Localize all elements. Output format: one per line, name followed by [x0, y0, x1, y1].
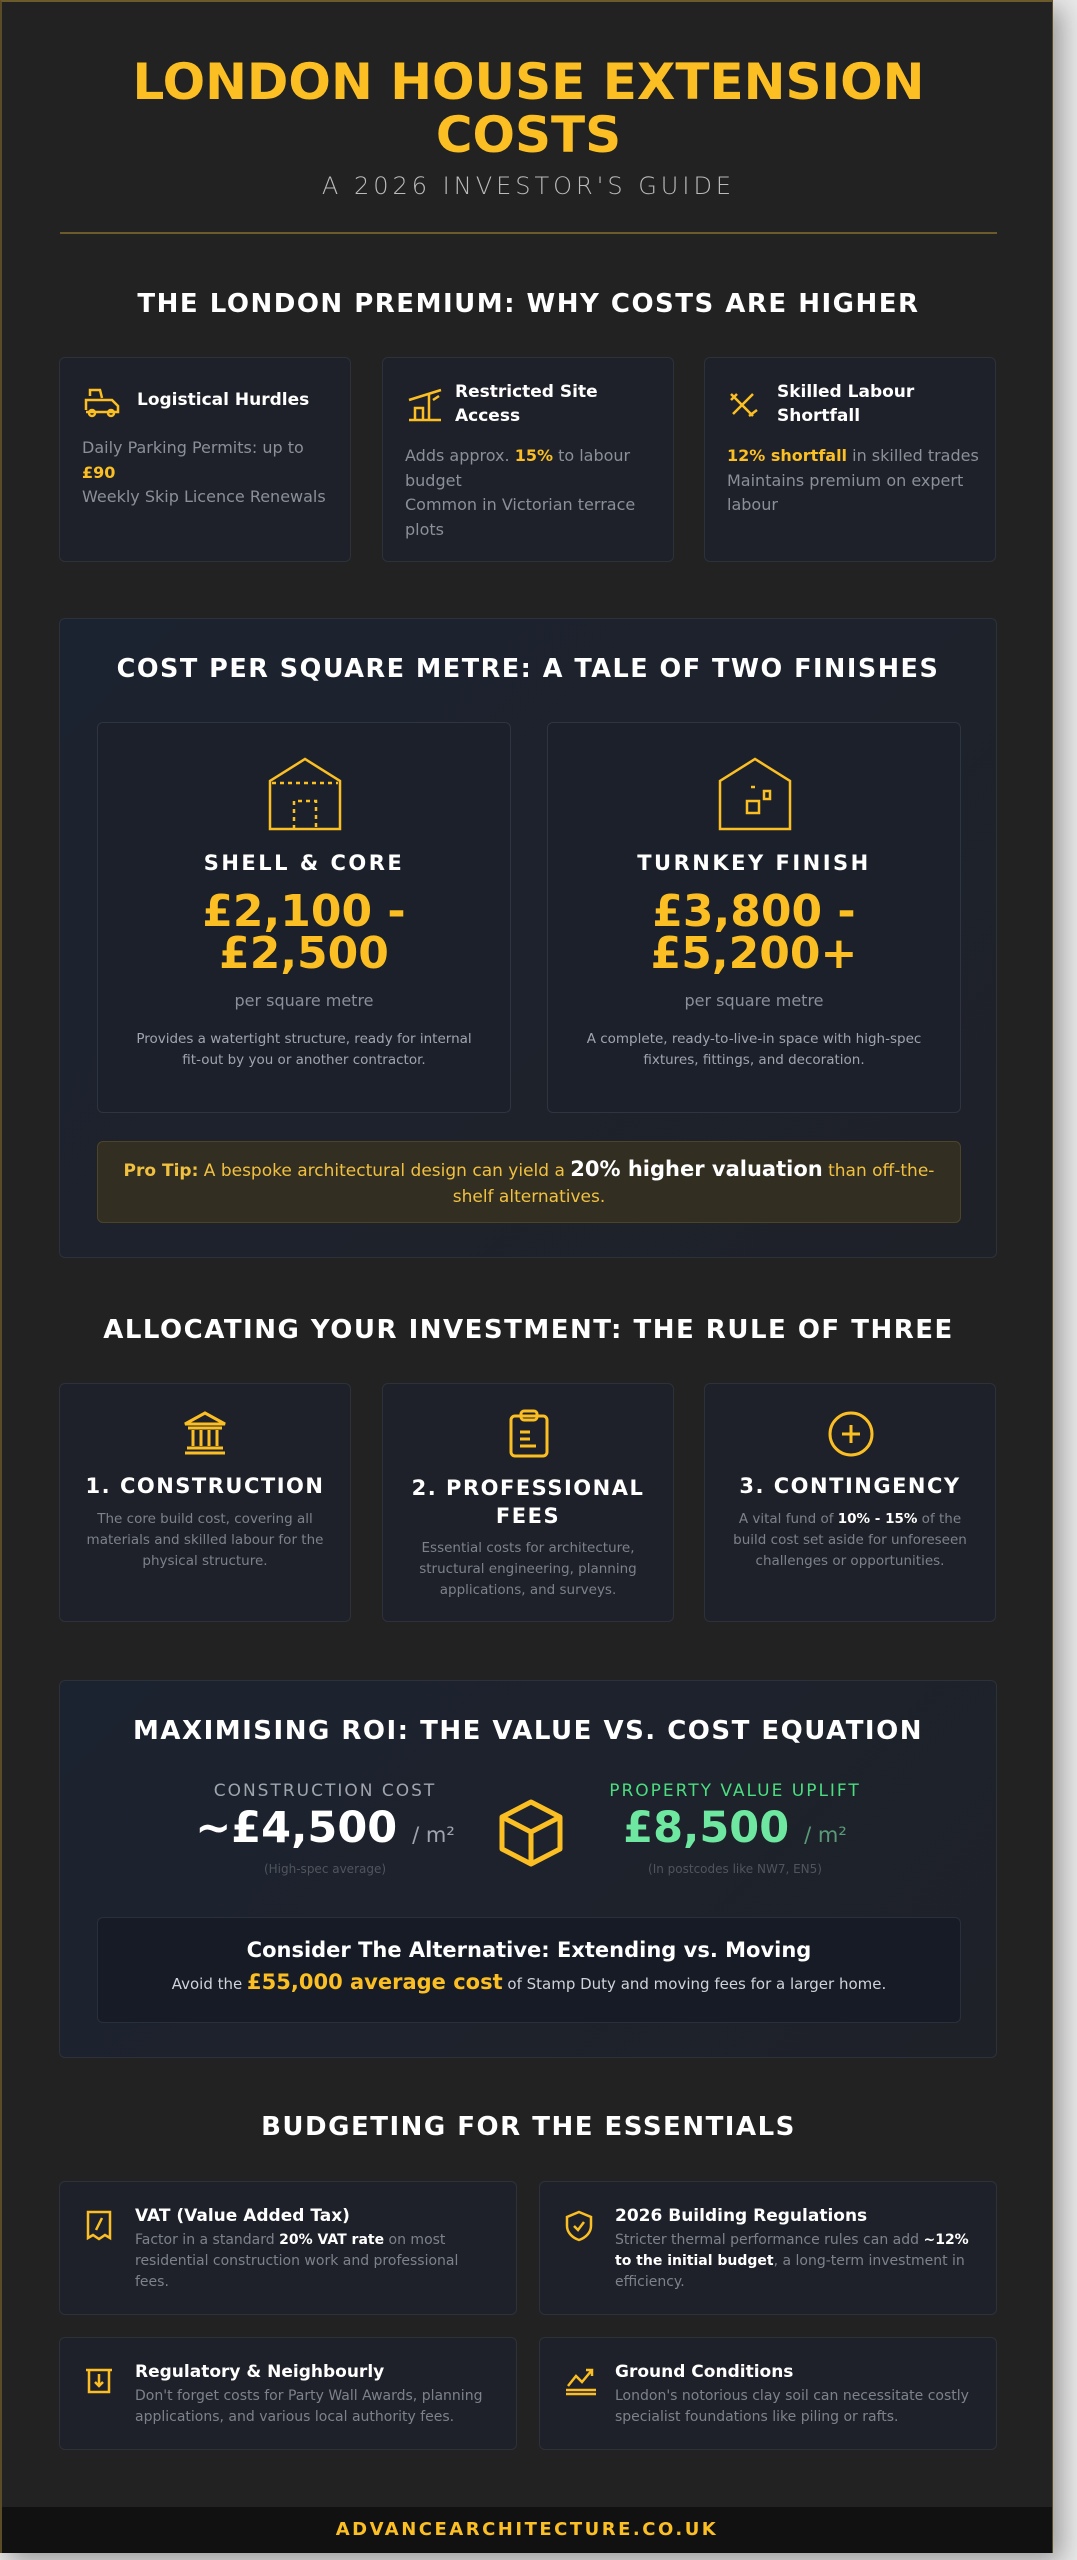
icon: house outline dashed	[268, 758, 342, 830]
description: A complete, ready-to-live-in space with high-spec fixtures, fittings, and decoration.	[587, 1031, 921, 1068]
card text: 12% shortfall in skilled trades	[727, 446, 979, 465]
heading: london premium: THE LONDON PREMIUM: WHY COSTS ARE HIGHER	[137, 289, 920, 319]
card text: The core build cost, covering all materials and skilled labour for the physical structure.	[87, 1511, 323, 1569]
panel: regulatory	[59, 2337, 517, 2450]
sub-card: turnkey	[547, 722, 961, 1113]
footer: ADVANCEARCHITECTURE.CO.UK	[336, 2519, 718, 2540]
callout: pro tip: Pro Tip: A bespoke architectural design can yield a 20% higher valuation than off-the-shelf alternatives.	[124, 1157, 934, 1207]
card title: Access	[455, 406, 520, 426]
card title: 2. PROFESSIONAL	[412, 1476, 644, 1500]
card title: Shortfall	[777, 406, 860, 426]
icon: cube	[500, 1800, 562, 1866]
heading: MAXIMISING ROI: THE VALUE VS. COST EQUATION	[133, 1716, 923, 1746]
stat: value uplift: £8,500 / m²	[623, 1803, 847, 1853]
card title: 1. CONSTRUCTION	[86, 1474, 324, 1498]
price: £2,500	[219, 928, 389, 979]
card title: 2026 Building Regulations	[615, 2206, 867, 2226]
subtitle: A 2026 INVESTOR'S GUIDE	[322, 172, 735, 200]
stat: construction cost: ~£4,500 / m²	[195, 1803, 455, 1853]
icon: shield	[566, 2210, 592, 2242]
heading: COST PER SQUARE METRE: A TALE OF TWO FINISHES	[117, 654, 939, 684]
stat: value uplift: (In postcodes like NW7, EN5)	[648, 1862, 822, 1876]
card title	[777, 382, 914, 426]
icon: crane	[408, 388, 442, 422]
panel: professional fees	[382, 1383, 674, 1622]
icon: plus circle	[828, 1412, 874, 1456]
card title: Skilled Labour	[777, 382, 914, 402]
stat: value uplift: PROPERTY VALUE UPLIFT	[609, 1781, 861, 1801]
panel: construction	[59, 1383, 351, 1622]
unit: per square metre	[234, 991, 374, 1010]
panel: contingency	[704, 1383, 996, 1622]
heading: essentials: BUDGETING FOR THE ESSENTIALS	[261, 2112, 796, 2142]
card title: FEES	[496, 1504, 560, 1528]
card text: Stricter thermal performance rules can add ~12% to the initial budget, a long-term investment in efficiency.	[615, 2232, 969, 2290]
heading: rule of three: ALLOCATING YOUR INVESTMENT: THE RULE OF THREE	[103, 1315, 954, 1345]
icon: chart	[566, 2368, 596, 2396]
unit: per square metre	[684, 991, 824, 1010]
card text: Essential costs for architecture, structural engineering, planning applications, and surveys.	[419, 1540, 637, 1598]
panel: cost per square metre	[59, 618, 997, 1258]
panel: VAT	[59, 2181, 517, 2315]
card text: Daily Parking Permits: up to £90	[82, 438, 304, 482]
card title	[412, 1476, 644, 1528]
price	[651, 886, 857, 979]
card text: A vital fund of 10% - 15% of the build cost set aside for unforeseen challenges or opportunities.	[733, 1511, 967, 1569]
icon: tools	[730, 393, 758, 417]
title: COSTS	[436, 106, 621, 164]
card title: Regulatory & Neighbourly	[135, 2362, 384, 2382]
panel: logistical hurdles	[59, 357, 351, 562]
panel: restricted site access	[382, 357, 674, 562]
panel: ground conditions	[539, 2337, 997, 2450]
stat: construction cost	[195, 1781, 455, 1876]
icon: van	[84, 388, 120, 418]
stat: construction cost: (High-spec average)	[264, 1862, 386, 1876]
callout: alternative	[97, 1917, 961, 2023]
label: TURNKEY FINISH	[637, 851, 871, 875]
card text: Weekly Skip Licence Renewals	[82, 487, 326, 506]
card text	[727, 446, 979, 514]
panel: skilled labour	[704, 357, 996, 562]
stat: construction cost: CONSTRUCTION COST	[214, 1781, 436, 1801]
icon: clipboard	[510, 1410, 548, 1458]
sub-card: shell & core	[97, 722, 511, 1113]
price	[202, 886, 406, 979]
card text: Maintains premium on expert labour	[727, 470, 963, 514]
card text	[82, 438, 326, 506]
title	[132, 53, 924, 164]
card title: 3. CONTINGENCY	[739, 1474, 961, 1498]
card title: Ground Conditions	[615, 2362, 793, 2382]
stat: value uplift	[609, 1781, 861, 1876]
card text: London's notorious clay soil can necessitate costly specialist foundations like piling or rafts.	[615, 2388, 969, 2425]
description: Provides a watertight structure, ready for internal fit-out by you or another contractor.	[136, 1031, 472, 1068]
label: SHELL & CORE	[204, 851, 404, 875]
panel: maximising roi	[59, 1680, 997, 2058]
icon: document	[86, 2368, 112, 2394]
card title: Restricted Site	[455, 382, 598, 402]
card text: Don't forget costs for Party Wall Awards, planning applications, and various local authority fees.	[135, 2388, 482, 2425]
card title: VAT (Value Added Tax)	[135, 2206, 350, 2226]
icon: receipt	[86, 2210, 112, 2240]
callout: pro tip	[97, 1141, 961, 1223]
panel: building regulations	[539, 2181, 997, 2315]
price: £3,800 -	[652, 886, 856, 937]
card text	[405, 446, 635, 538]
price: £2,100 -	[202, 886, 406, 937]
callout: alternative: Avoid the £55,000 average cost of Stamp Duty and moving fees for a larger home.	[172, 1970, 886, 1994]
card text: Common in Victorian terrace plots	[405, 495, 635, 538]
icon: bank	[184, 1411, 226, 1454]
icon: house finished	[718, 758, 792, 830]
card title: Logistical Hurdles	[137, 390, 309, 410]
card text: Factor in a standard 20% VAT rate on most residential construction work and professional fees.	[135, 2232, 458, 2290]
price: £5,200+	[651, 928, 857, 979]
title: LONDON HOUSE EXTENSION	[132, 53, 924, 111]
callout: alternative: Consider The Alternative: Extending vs. Moving	[247, 1938, 811, 1962]
card text: Adds approx. 15% to labour budget	[405, 446, 630, 490]
card title	[455, 382, 598, 426]
footer	[2, 2507, 1052, 2553]
